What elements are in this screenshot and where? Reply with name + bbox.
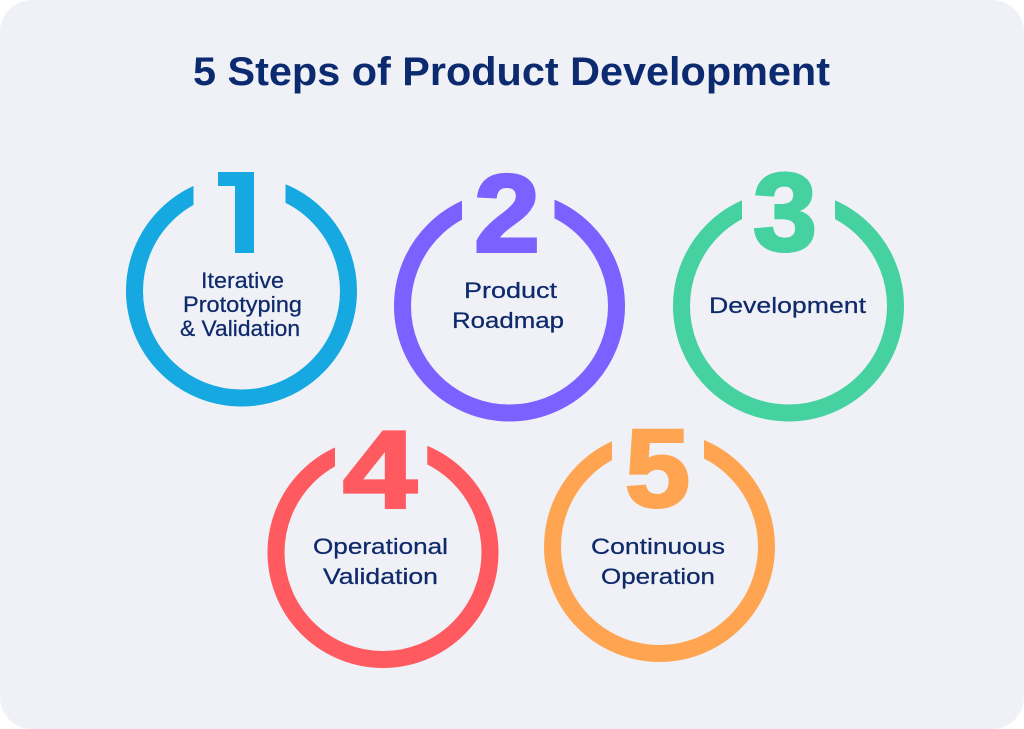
label: step 2: Roadmap bbox=[452, 308, 564, 333]
number 4: 4 bbox=[343, 408, 417, 532]
number 3: 3 bbox=[753, 152, 817, 274]
label: step 1 bbox=[180, 268, 302, 341]
number 5: 5 bbox=[625, 408, 690, 530]
label: step 4 bbox=[313, 534, 448, 589]
step 4: Operational Validation bbox=[276, 408, 490, 660]
step 1: Iterative Prototyping & Validation bbox=[134, 152, 348, 398]
step 3: Development bbox=[682, 152, 896, 413]
label: step 1: Prototyping bbox=[183, 292, 302, 317]
label: step 1: & Validation bbox=[180, 316, 300, 341]
label: step 1: Iterative bbox=[201, 268, 284, 293]
label: step 3: Development bbox=[709, 293, 866, 318]
step 2: Product Roadmap bbox=[402, 152, 616, 413]
label: step 5: Operation bbox=[601, 564, 715, 589]
label: step 2: Product bbox=[464, 278, 557, 303]
step 5: Continuous Operation bbox=[552, 408, 766, 654]
label: step 5 bbox=[591, 534, 725, 589]
label: step 4: Operational bbox=[313, 534, 448, 559]
label: step 2 bbox=[452, 278, 564, 333]
label: step 4: Validation bbox=[323, 564, 438, 589]
number 2: 2 bbox=[474, 152, 540, 276]
number 1: 1 bbox=[222, 152, 262, 276]
label: step 5: Continuous bbox=[591, 534, 725, 559]
title: 5 Steps of Product Development bbox=[193, 50, 830, 94]
